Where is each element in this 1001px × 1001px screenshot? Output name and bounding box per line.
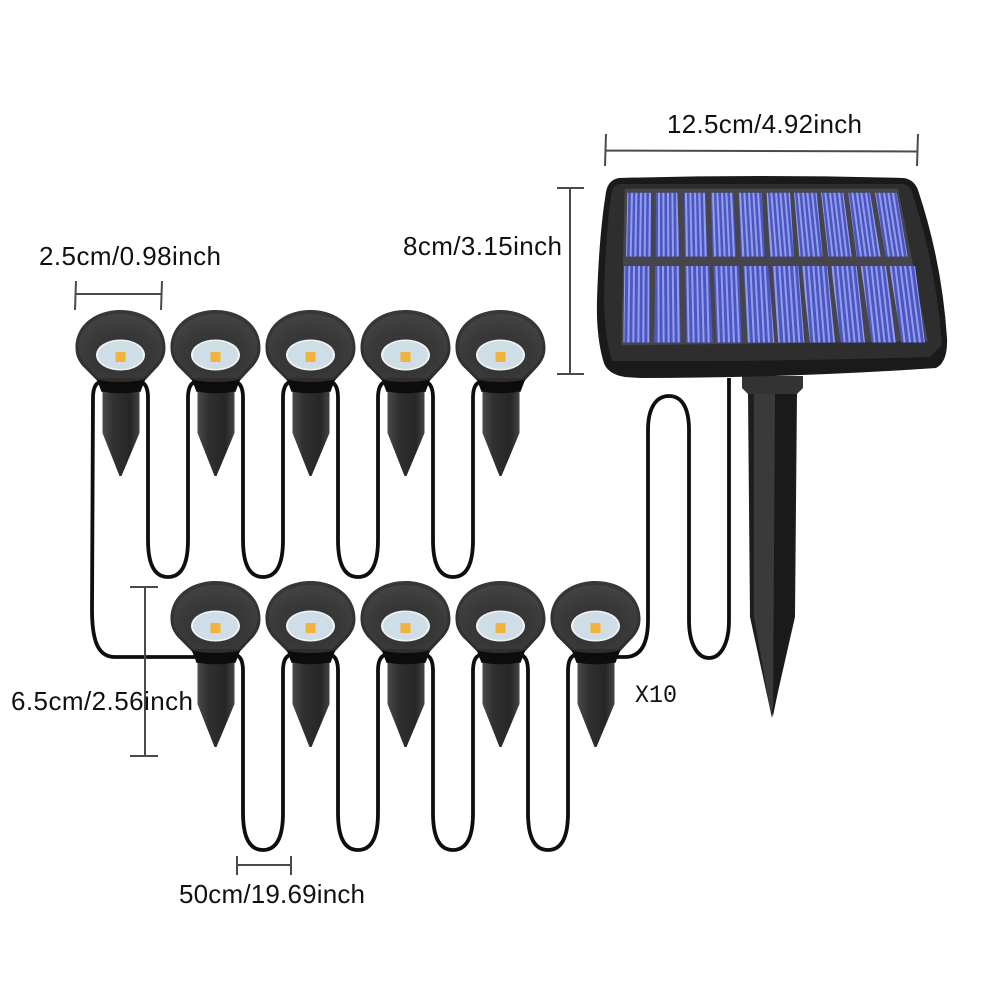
dimension: cable spacing: 50cm/19.69inch xyxy=(179,879,365,909)
solar panel xyxy=(597,176,947,378)
cable linking upper row to lower row xyxy=(92,382,195,657)
panel inner bezel xyxy=(604,184,942,361)
cables between upper lamps xyxy=(141,382,480,577)
cables between lower lamps xyxy=(236,655,575,850)
dimension: cable spacing xyxy=(179,856,365,909)
lamp 7 xyxy=(266,581,356,747)
dimension: panel height xyxy=(403,188,584,374)
diagram: solar lights with dimensions xyxy=(12,114,948,904)
lamp 2 xyxy=(170,310,260,476)
lamp 6 xyxy=(170,581,260,747)
dimension: lamp height xyxy=(11,587,193,756)
dimension: panel width xyxy=(605,109,918,166)
dimension: lamp head width: 2.5cm/0.98inch xyxy=(39,241,221,271)
cable from last lamp to solar panel xyxy=(617,378,729,658)
lamp 9 xyxy=(456,581,546,747)
solar cells xyxy=(620,189,930,347)
lamp 4 xyxy=(360,310,450,476)
dimension: lamp head width xyxy=(39,241,221,310)
lamp 10 xyxy=(550,581,640,747)
dimension: panel height: 8cm/3.15inch xyxy=(403,231,562,261)
panel frame xyxy=(597,176,947,378)
lamp 8 xyxy=(360,581,450,747)
quantity label: X10 xyxy=(635,681,677,710)
lamp 5 xyxy=(456,310,546,476)
dimension: lamp height: 6.5cm/2.56inch xyxy=(11,686,193,716)
lamp 3 xyxy=(266,310,356,476)
dimension: panel width: 12.5cm/4.92inch xyxy=(667,109,862,139)
lamp 1 xyxy=(76,310,166,476)
solar panel ground stake xyxy=(742,376,803,718)
